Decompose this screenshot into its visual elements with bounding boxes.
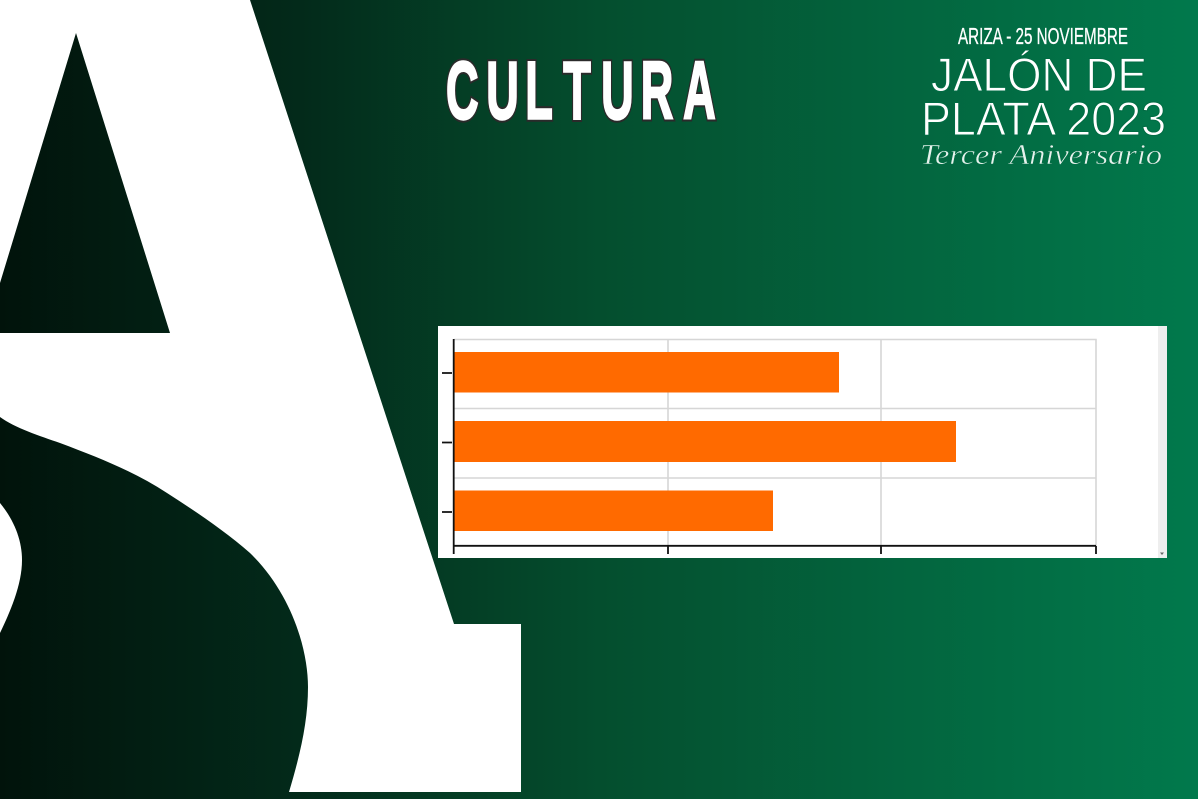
bar 1 [454,352,839,392]
title: CULTURA [446,46,716,137]
chart grid [454,339,1096,546]
anniversary subtitle: Tercer Aniversario [920,140,1162,171]
large white logo letter shape [0,0,521,792]
bar 2 [454,421,956,462]
chart panel [438,326,1167,558]
scrollbar [1158,326,1167,558]
chart axes [442,339,1096,554]
event logo [920,23,1166,171]
chart background [438,326,1167,558]
title: CULTURA [446,46,716,137]
event name line 2: PLATA 2023 [921,92,1166,145]
bar 3 [454,490,773,531]
event name line 1: JALÓN DE [931,48,1147,101]
